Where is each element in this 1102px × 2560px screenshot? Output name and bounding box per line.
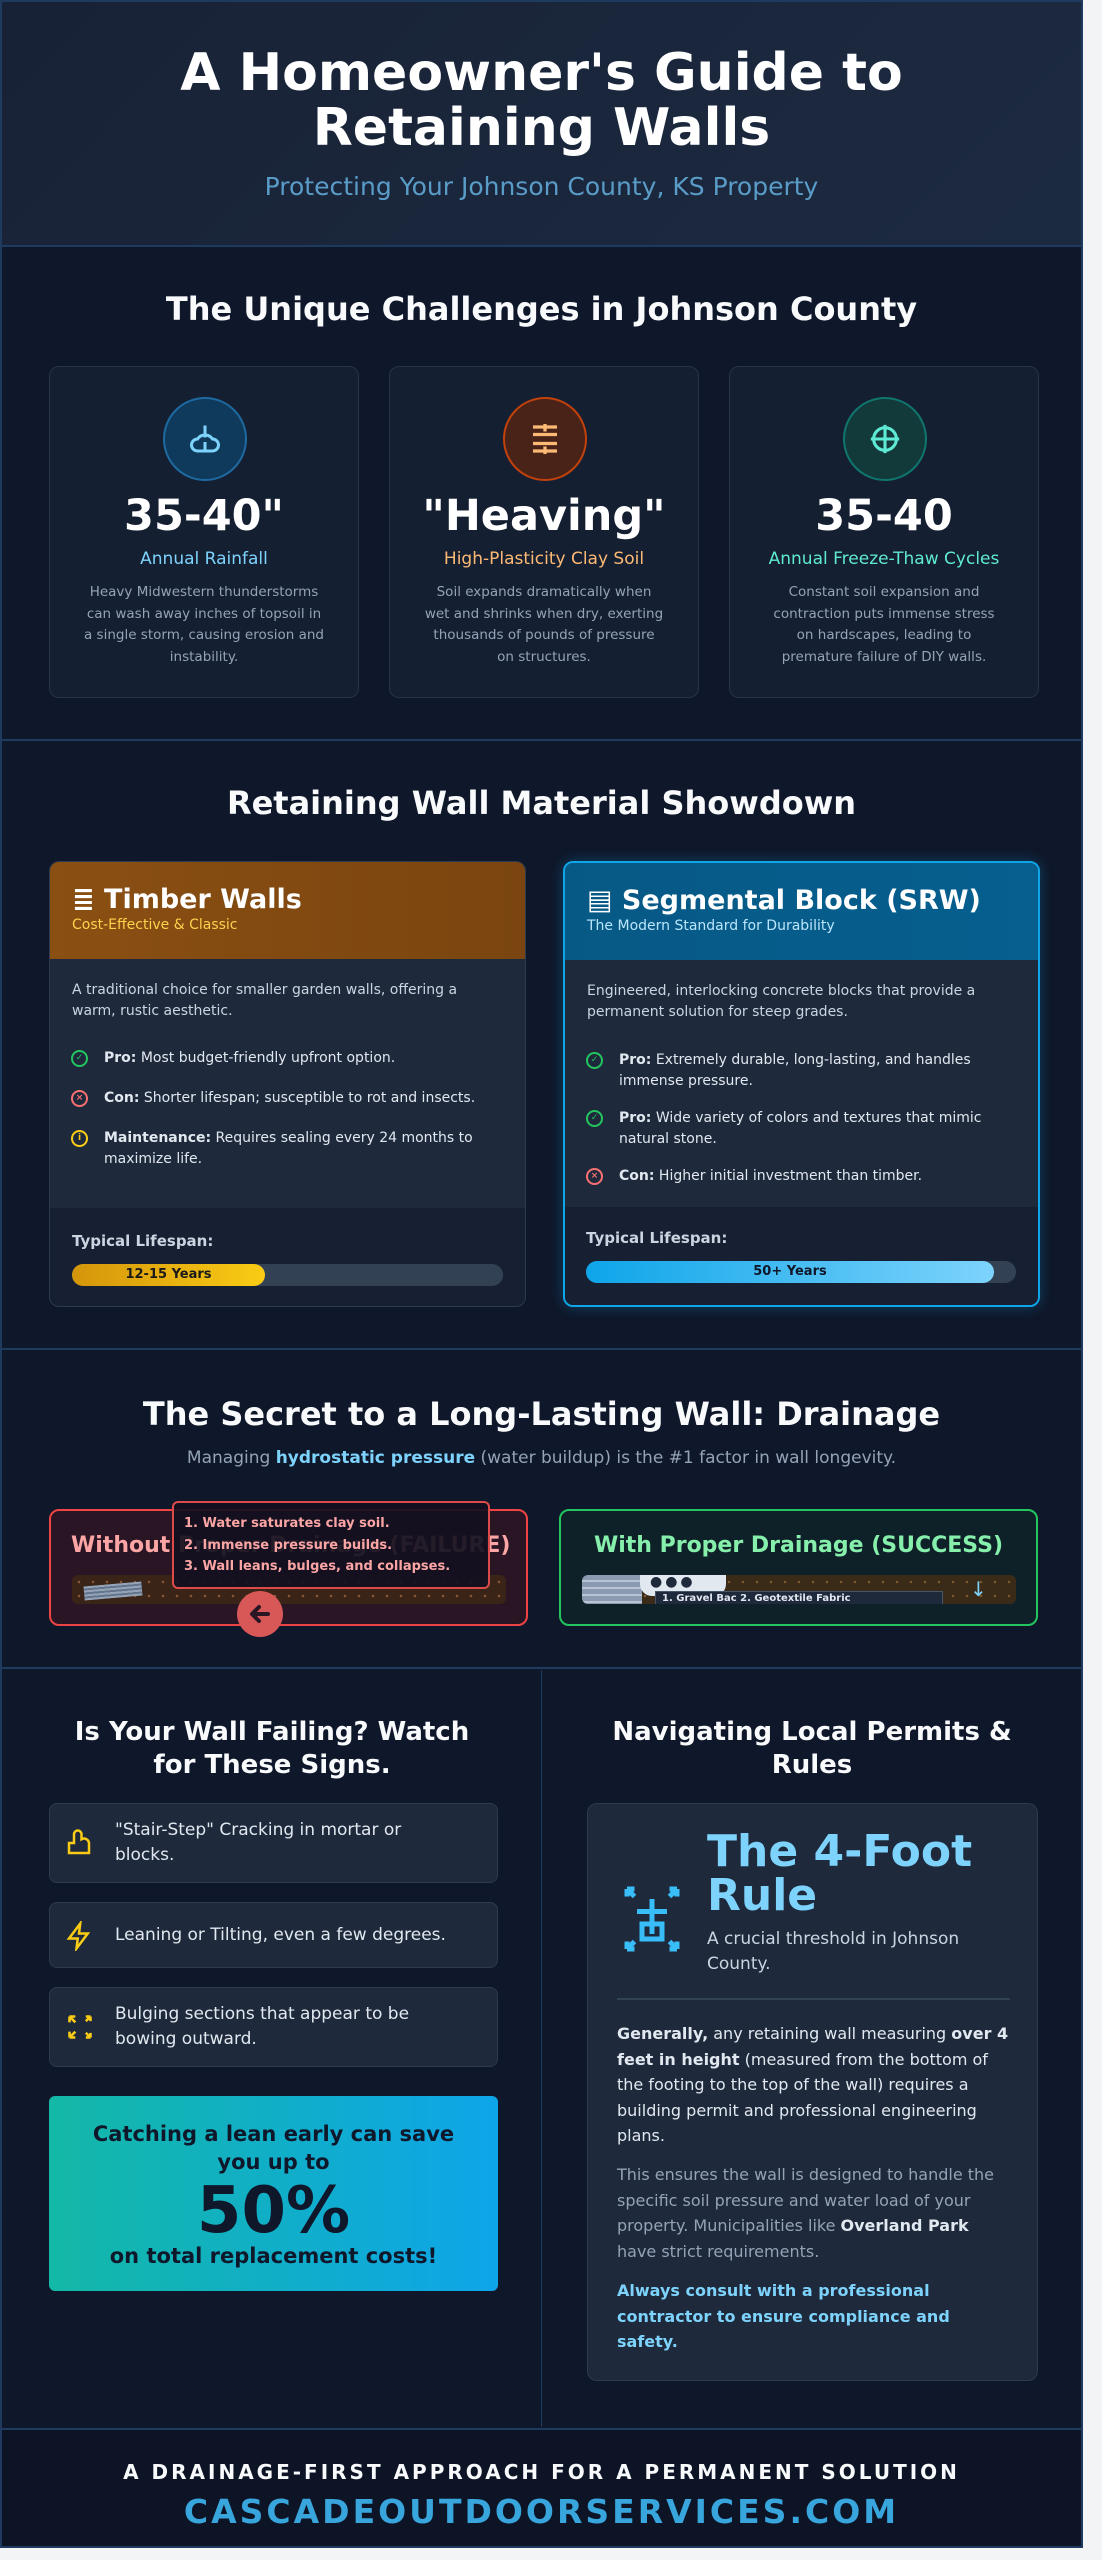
icon: layers xyxy=(503,397,587,481)
panel: 4-foot rule: Always consult with a professional contractor to ensure compliance and safety. xyxy=(617,2281,950,2351)
title xyxy=(180,43,903,158)
callout: failure steps: 1. Water saturates clay soil. xyxy=(184,1516,390,1531)
callout: failure steps: 3. Wall leans, bulges, and collapses. xyxy=(184,1559,450,1574)
con item: Con: Shorter lifespan; susceptible to rot and insects. xyxy=(104,1090,475,1106)
panel: segmental block xyxy=(563,861,1040,1307)
panel: segmental block: × xyxy=(591,1171,598,1181)
section: drainage xyxy=(2,1351,1081,1669)
callout: 50% savings: 50% xyxy=(197,2174,350,2248)
heading xyxy=(612,1717,1012,1780)
panel: segmental block: ✓ xyxy=(591,1055,598,1065)
section: materials xyxy=(2,742,1081,1350)
lifespan bar: Typical Lifespan: xyxy=(586,1229,727,1247)
card: rainfall: Heavy Midwestern thunderstorms can wash away inches of topsoil in a single storm, causing erosion and instability. xyxy=(84,584,324,664)
callout: failure steps xyxy=(172,1501,490,1589)
callout: 50% savings: on total replacement costs! xyxy=(110,2244,437,2268)
con item: Con: Higher initial investment than timber. xyxy=(619,1168,922,1184)
maintenance item: Maintenance: Requires sealing every 24 months to maximize life. xyxy=(104,1130,473,1167)
timber header: ≣ Timber Walls xyxy=(72,884,302,915)
panel: 4-foot rule xyxy=(587,1803,1038,2381)
subtitle: Protecting Your Johnson County, KS Property xyxy=(265,172,818,201)
rule title xyxy=(707,1826,972,1921)
panel: timber: ✓ xyxy=(76,1053,83,1063)
lifespan bar xyxy=(565,1207,1038,1305)
sign: leaning: Leaning or Tilting, even a few degrees. xyxy=(115,1925,446,1945)
footer: A DRAINAGE-FIRST APPROACH FOR A PERMANENT SOLUTION xyxy=(123,2460,960,2484)
card: clay xyxy=(389,366,699,698)
heading: The Secret to a Long-Lasting Wall: Drainage xyxy=(143,1395,940,1433)
lifespan bar xyxy=(50,1208,525,1306)
heading: Retaining Wall Material Showdown xyxy=(227,784,856,822)
panel: timber: × xyxy=(76,1093,83,1103)
panel: 4-foot rule: This ensures the wall is designed to handle the specific soil pressure and water load of your property. Municipalities like Overland Park have strict requirements. xyxy=(617,2165,994,2260)
panel: segmental block: Engineered, interlocking concrete blocks that provide a permanent solution for steep grades. xyxy=(587,983,975,1020)
sign: cracking: "Stair-Step" Cracking in mortar or blocks. xyxy=(115,1820,401,1865)
pro item: Pro: Most budget-friendly upfront option. xyxy=(104,1050,395,1066)
card: freeze-thaw: Constant soil expansion and contraction puts immense stress on hardscapes, leading to premature failure of DIY walls. xyxy=(773,584,995,664)
card: freeze-thaw: Annual Freeze-Thaw Cycles xyxy=(769,549,999,569)
rule body: Generally, any retaining wall measuring over 4 feet in height (measured from the bottom of the footing to the top of the wall) requires a building permit and professional engineering plans. xyxy=(617,2024,1008,2145)
card: rainfall: 35-40" xyxy=(124,491,284,541)
footer xyxy=(2,2428,1081,2548)
panel: segmental block: ✓ xyxy=(591,1113,598,1123)
heading: Is Your Wall Failing? Watch xyxy=(75,1717,469,1747)
heading: Rules xyxy=(772,1750,852,1780)
rule title: The 4-Foot xyxy=(707,1826,972,1877)
card: clay: "Heaving" xyxy=(422,491,666,541)
drainage strip xyxy=(582,1575,1016,1604)
pro item 1: Pro: Extremely durable, long-lasting, and handles immense pressure. xyxy=(619,1052,971,1089)
icon: pressure arrow xyxy=(237,1591,283,1637)
pro item 2: Pro: Wide variety of colors and textures that mimic natural stone. xyxy=(619,1110,981,1147)
title: Retaining Walls xyxy=(313,98,770,158)
callout: 50% savings: you up to xyxy=(217,2150,330,2174)
panel: without drainage xyxy=(49,1509,528,1626)
rule title: Rule xyxy=(707,1870,817,1921)
section: warning signs xyxy=(2,1670,542,2427)
lifespan bar: 50+ Years xyxy=(753,1264,827,1279)
panel: with drainage xyxy=(559,1509,1038,1626)
panel: with drainage: With Proper Drainage (SUCCESS) xyxy=(594,1533,1003,1558)
sign: bulging: Bulging sections that appear to be bowing outward. xyxy=(115,2004,409,2049)
lifespan bar: 12-15 Years xyxy=(125,1267,212,1282)
sign: leaning xyxy=(49,1902,498,1968)
card: freeze-thaw xyxy=(729,366,1039,698)
header xyxy=(2,2,1081,247)
title: A Homeowner's Guide to xyxy=(180,43,903,103)
timber header: Cost-Effective & Classic xyxy=(72,917,238,933)
heading: for These Signs. xyxy=(153,1750,391,1780)
drainage strip: 1. Gravel Bac 2. Geotextile Fabric xyxy=(662,1593,851,1604)
lifespan bar: Typical Lifespan: xyxy=(72,1232,213,1250)
icon: measure xyxy=(624,1886,680,1952)
sign: bulging xyxy=(49,1987,498,2067)
srw header: The Modern Standard for Durability xyxy=(587,918,835,934)
sign: cracking xyxy=(49,1803,498,1883)
section: challenges xyxy=(2,248,1081,741)
srw header: ▤ Segmental Block (SRW) xyxy=(587,885,981,916)
callout: 50% savings: Catching a lean early can save xyxy=(93,2122,454,2146)
panel: timber xyxy=(49,861,526,1307)
icon: snow target xyxy=(843,397,927,481)
soil strip xyxy=(72,1575,506,1604)
callout: 50% savings xyxy=(49,2096,498,2291)
footer: CASCADEOUTDOORSERVICES.COM xyxy=(184,2492,899,2531)
callout: failure steps: 2. Immense pressure builds. xyxy=(184,1538,392,1552)
card: clay: High-Plasticity Clay Soil xyxy=(444,549,644,569)
icon: cloud rain xyxy=(163,397,247,481)
subtitle: Managing hydrostatic pressure (water buildup) is the #1 factor in wall longevity. xyxy=(187,1448,896,1468)
card: rainfall xyxy=(49,366,359,698)
panel: without drainage: Without Proper Drainage (FAILURE) xyxy=(71,1533,510,1558)
heading: The Unique Challenges in Johnson County xyxy=(166,290,917,328)
panel: 4-foot rule: A crucial threshold in Johnson County. xyxy=(707,1929,959,1974)
heading xyxy=(75,1717,469,1780)
card: freeze-thaw: 35-40 xyxy=(815,491,953,541)
timber header xyxy=(50,862,525,959)
srw header xyxy=(565,863,1038,960)
section: permits xyxy=(612,1717,1012,1780)
tilted wall xyxy=(84,1581,142,1601)
card: rainfall: Annual Rainfall xyxy=(140,549,268,569)
drainage strip: ↓ xyxy=(970,1577,987,1601)
heading: Navigating Local Permits & xyxy=(612,1717,1012,1747)
panel: timber: i xyxy=(78,1133,81,1143)
panel: timber: A traditional choice for smaller garden walls, offering a warm, rustic aesthetic. xyxy=(72,982,457,1019)
card: clay: Soil expands dramatically when wet and shrinks when dry, exerting thousands of pounds of pressure on structures. xyxy=(425,584,663,664)
